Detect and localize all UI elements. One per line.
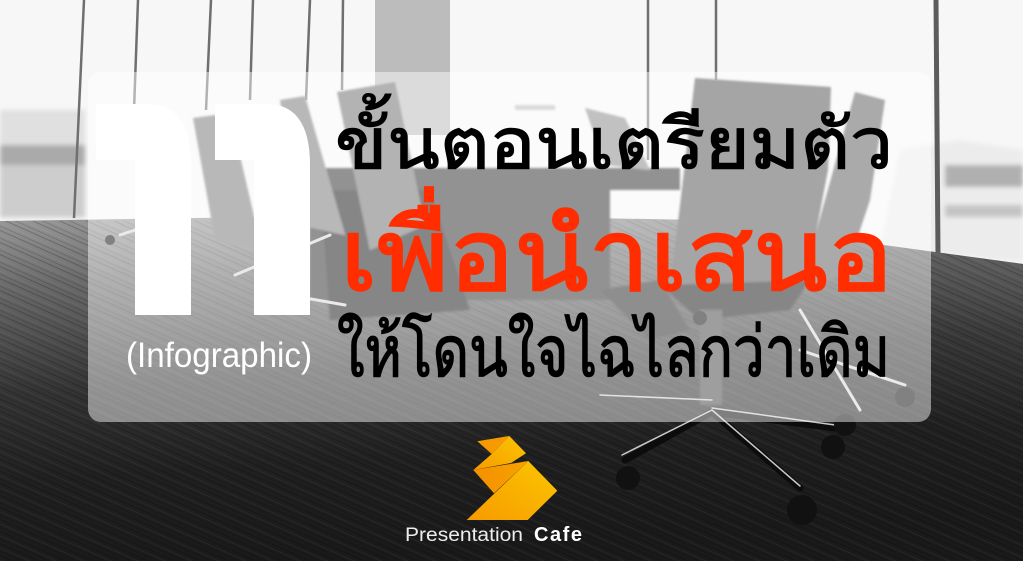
heading line 1: ขั้นตอนเตรียมตัว xyxy=(335,93,893,183)
subtitle: (Infographic): (Infographic) xyxy=(126,336,312,375)
heading line 3: ให้โดนใจไฉไลกว่าเดิม xyxy=(337,312,890,391)
logo wordmark xyxy=(405,524,582,546)
chair bases xyxy=(120,215,905,488)
logo icon xyxy=(467,436,557,520)
table and dark furniture xyxy=(193,78,885,405)
heading line 2: เพื่อนำเสนอ xyxy=(340,187,893,312)
big number 11: 1 xyxy=(0,41,450,374)
logo wordmark: Cafe xyxy=(534,524,582,546)
big number 11 xyxy=(132,104,310,315)
translucent panel xyxy=(88,72,931,422)
logo wordmark: Presentation xyxy=(405,525,523,546)
